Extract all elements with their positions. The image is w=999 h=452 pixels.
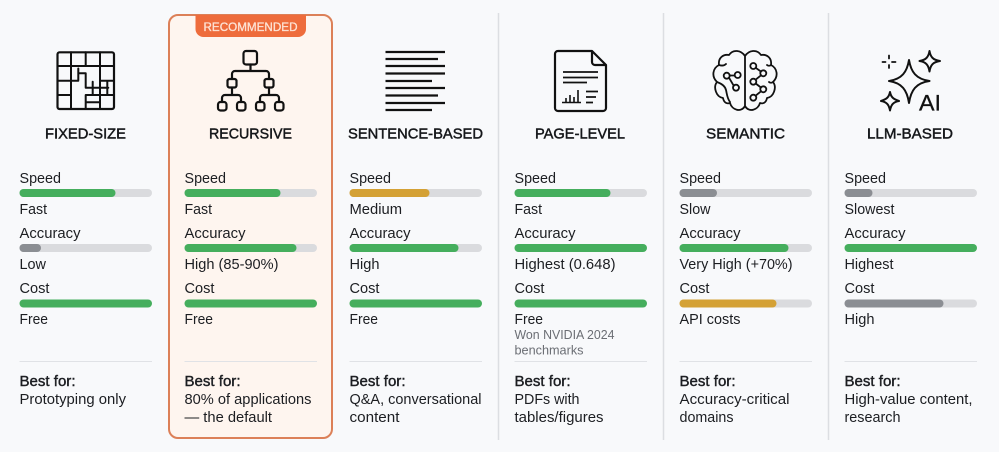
metric: accuracy xyxy=(514,226,647,273)
best for: Best for: xyxy=(844,374,900,390)
metric: speed: Speed xyxy=(20,171,61,187)
metric: speed xyxy=(350,171,482,218)
metric: accuracy: Low xyxy=(20,257,47,273)
best for: Best for: xyxy=(20,374,76,390)
best for xyxy=(20,374,127,408)
best for: High-value content, xyxy=(844,392,972,408)
metric: cost: Free xyxy=(350,312,378,328)
metric: cost: Free xyxy=(514,312,543,328)
heading: LLM-BASED xyxy=(867,126,953,142)
best for: Best for: xyxy=(350,374,406,390)
panel: page-level xyxy=(514,51,647,426)
metric: cost: Cost xyxy=(514,281,544,297)
metric: cost: Cost xyxy=(350,281,380,297)
best for xyxy=(184,374,312,426)
metric: speed xyxy=(184,171,317,218)
metric: speed: Fast xyxy=(184,202,212,218)
metric: speed: Speed xyxy=(350,171,391,187)
metric: accuracy xyxy=(184,226,317,273)
metric: speed: Speed xyxy=(514,171,556,187)
metric: accuracy: Very High (+70%) xyxy=(680,257,792,273)
metric: cost: Cost xyxy=(184,281,214,297)
heading: RECURSIVE xyxy=(209,126,292,142)
best for: Best for: xyxy=(680,374,736,390)
metric: cost: Free xyxy=(184,312,213,328)
metric: accuracy: High xyxy=(350,257,380,273)
best for: research xyxy=(844,410,900,426)
metric: accuracy xyxy=(680,226,812,273)
best for: content xyxy=(350,410,400,426)
panel: fixed-size xyxy=(20,52,152,408)
panel: sentence-based xyxy=(348,52,483,426)
metric: accuracy xyxy=(20,226,152,273)
best for xyxy=(680,374,790,426)
metric: cost: Cost xyxy=(20,281,50,297)
badge: recommended xyxy=(196,15,306,37)
metric: speed: Slowest xyxy=(844,202,894,218)
best for: Best for: xyxy=(514,374,570,390)
metric: cost: Free xyxy=(20,312,48,328)
heading: SEMANTIC xyxy=(706,126,785,142)
badge: recommended: RECOMMENDED xyxy=(204,20,298,34)
metric: cost: High xyxy=(844,312,874,328)
best for xyxy=(350,374,482,426)
icon: AI sparkles: AI xyxy=(919,90,941,116)
panel: recursive (recommended) xyxy=(169,15,332,438)
best for: tables/figures xyxy=(514,410,604,426)
panel: semantic xyxy=(680,51,812,426)
heading: SENTENCE-BASED xyxy=(348,126,483,142)
note: benchmarks xyxy=(514,328,615,358)
metric: cost: Cost xyxy=(680,281,710,297)
metric: cost xyxy=(514,281,647,328)
metric: cost: API costs xyxy=(680,312,740,328)
metric: speed: Speed xyxy=(184,171,226,187)
icon: brain xyxy=(713,51,777,110)
best for xyxy=(514,374,604,426)
note: benchmarks: Won NVIDIA 2024 xyxy=(514,328,615,342)
best for: — the default xyxy=(184,410,272,426)
best for: Q&A, conversational xyxy=(350,392,482,408)
icon: grid xyxy=(58,52,114,109)
icon: document xyxy=(555,51,606,111)
best for: PDFs with xyxy=(514,392,580,408)
metric: cost xyxy=(350,281,482,328)
best for: 80% of applications xyxy=(184,392,312,408)
heading: FIXED-SIZE xyxy=(45,126,126,142)
metric: accuracy xyxy=(844,226,977,273)
highlight card xyxy=(169,15,332,438)
metric: speed: Fast xyxy=(20,202,47,218)
metric: accuracy: Accuracy xyxy=(350,226,411,242)
note: benchmarks: benchmarks xyxy=(514,344,584,358)
metric: speed xyxy=(680,171,812,218)
metric: cost xyxy=(844,281,977,328)
best for: Accuracy-critical xyxy=(680,392,790,408)
metric: accuracy: Accuracy xyxy=(184,226,246,242)
metric: accuracy: Accuracy xyxy=(680,226,741,242)
metric: speed xyxy=(514,171,647,218)
metric: speed: Slow xyxy=(680,202,711,218)
metric: speed: Fast xyxy=(514,202,542,218)
metric: speed xyxy=(844,171,977,218)
best for xyxy=(844,374,972,426)
metric: accuracy xyxy=(350,226,482,273)
best for: Best for: xyxy=(184,374,240,390)
metric: cost: Cost xyxy=(844,281,874,297)
metric: speed xyxy=(20,171,152,218)
metric: speed: Speed xyxy=(680,171,721,187)
metric: accuracy: Accuracy xyxy=(20,226,81,242)
metric: accuracy: Accuracy xyxy=(844,226,906,242)
metric: cost xyxy=(20,281,152,328)
best for: Prototyping only xyxy=(20,392,127,408)
panel: llm-based xyxy=(844,51,977,426)
icon: text lines xyxy=(386,52,445,110)
metric: speed: Medium xyxy=(350,202,402,218)
metric: cost xyxy=(184,281,317,328)
best for: domains xyxy=(680,410,734,426)
icon: hierarchy xyxy=(218,51,284,110)
heading: PAGE-LEVEL xyxy=(535,126,625,142)
metric: accuracy: Accuracy xyxy=(514,226,576,242)
metric: cost xyxy=(680,281,812,328)
metric: accuracy: Highest (0.648) xyxy=(514,257,616,273)
metric: accuracy: Highest xyxy=(844,257,894,273)
metric: speed: Speed xyxy=(844,171,886,187)
metric: accuracy: High (85-90%) xyxy=(184,257,278,273)
icon: AI sparkles xyxy=(881,51,941,116)
